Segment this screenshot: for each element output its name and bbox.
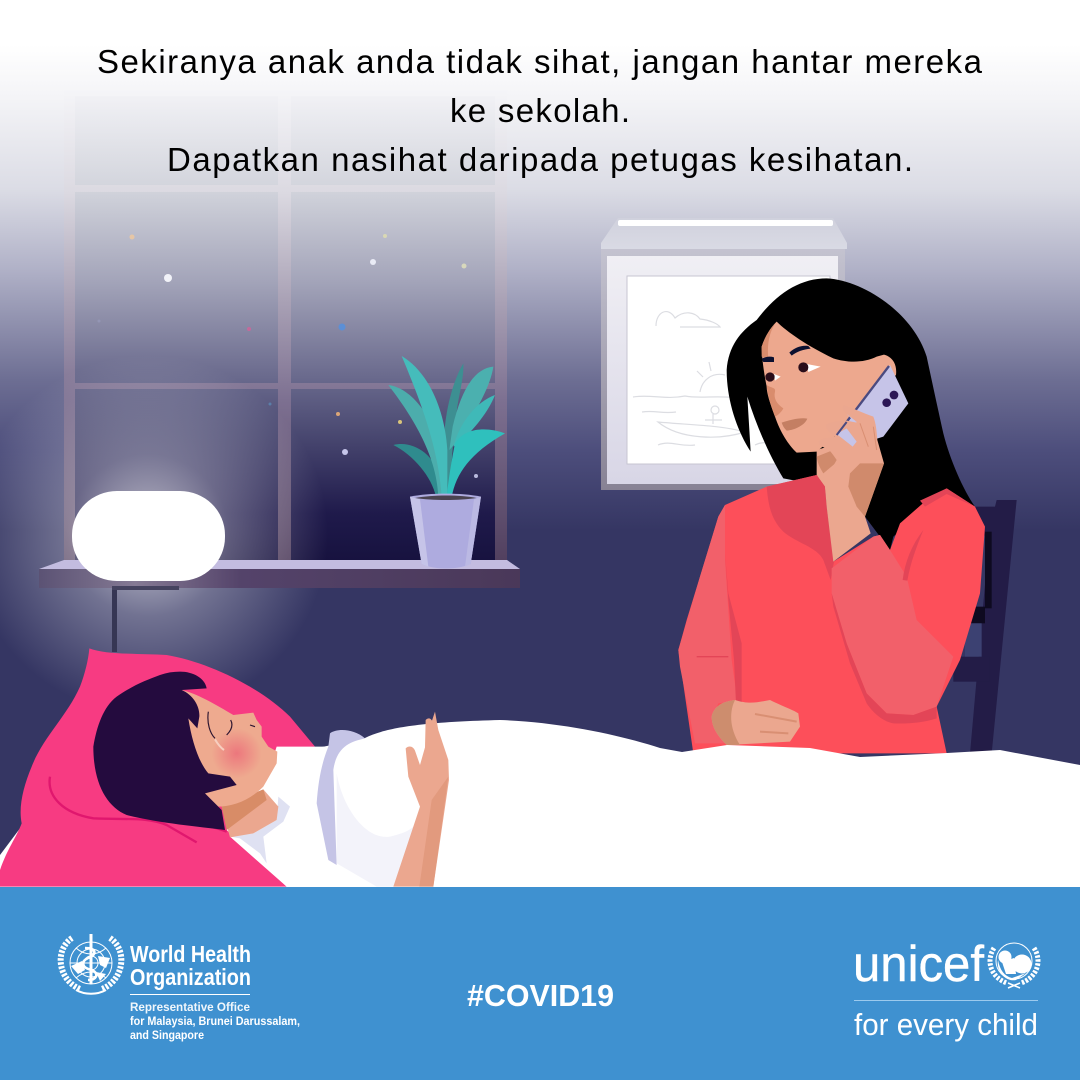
phone hand and forearm (818, 405, 884, 562)
WHO logo (61, 934, 300, 1042)
window (64, 90, 507, 562)
finger lines (860, 423, 877, 450)
UNICEF wordmark: unicef (853, 936, 984, 992)
mother hair (727, 278, 975, 550)
UNICEF logo (853, 936, 1038, 1042)
right sleeve cuff edge (832, 535, 885, 577)
tear (215, 739, 224, 750)
right sleeve (832, 535, 953, 715)
neck (222, 789, 278, 837)
UNICEF emblem (990, 943, 1038, 988)
WHO logo: and Singapore (130, 1028, 204, 1042)
pillow crease (50, 777, 227, 842)
mother neck (817, 443, 838, 490)
lower hand (712, 700, 800, 745)
phone sliver between fingers (837, 428, 857, 447)
window shelf (39, 560, 520, 588)
lamp glow (0, 350, 330, 720)
closed eye (208, 712, 255, 738)
face shading (767, 385, 783, 417)
WHO logo: Organization (130, 964, 251, 990)
main message (97, 43, 983, 178)
shirt shadow (230, 797, 290, 863)
hair (93, 672, 237, 830)
framed picture (601, 218, 847, 490)
UNICEF tagline: for every child (854, 1007, 1038, 1042)
chair (953, 500, 1017, 753)
phone (837, 365, 908, 447)
face (182, 690, 277, 807)
mother (678, 278, 985, 753)
left sleeve (678, 505, 737, 743)
shirt (230, 747, 393, 887)
sweater (678, 475, 985, 753)
pillow (0, 648, 315, 887)
cheek blush (212, 728, 262, 778)
mother face (762, 322, 896, 453)
sketch drawing (633, 312, 780, 445)
hashtag: #COVID19 (467, 978, 614, 1013)
pot (410, 494, 481, 568)
WHO logo: for Malaysia, Brunei Darussalam, (130, 1014, 300, 1028)
eyes and brows (762, 346, 821, 382)
sweater shadow at neck (767, 475, 834, 580)
potted plant (388, 356, 505, 568)
WHO office text: Representative Office (130, 1000, 250, 1014)
sheet fold (317, 730, 365, 865)
sick child (0, 648, 449, 887)
main message: Dapatkan nasihat daripada petugas kesihatan. (167, 141, 913, 178)
floor lamp (72, 491, 225, 652)
arm and raised hand (393, 712, 449, 887)
WHO wordmark: World Health (130, 941, 251, 967)
main message: Sekiranya anak anda tidak sihat, jangan hantar mereka (97, 43, 983, 80)
footer band (0, 887, 1080, 1080)
main message: ke sekolah. (450, 92, 630, 129)
stars (98, 234, 478, 478)
bed sheet (0, 720, 1080, 887)
lips (782, 418, 807, 431)
WHO emblem (61, 934, 121, 994)
